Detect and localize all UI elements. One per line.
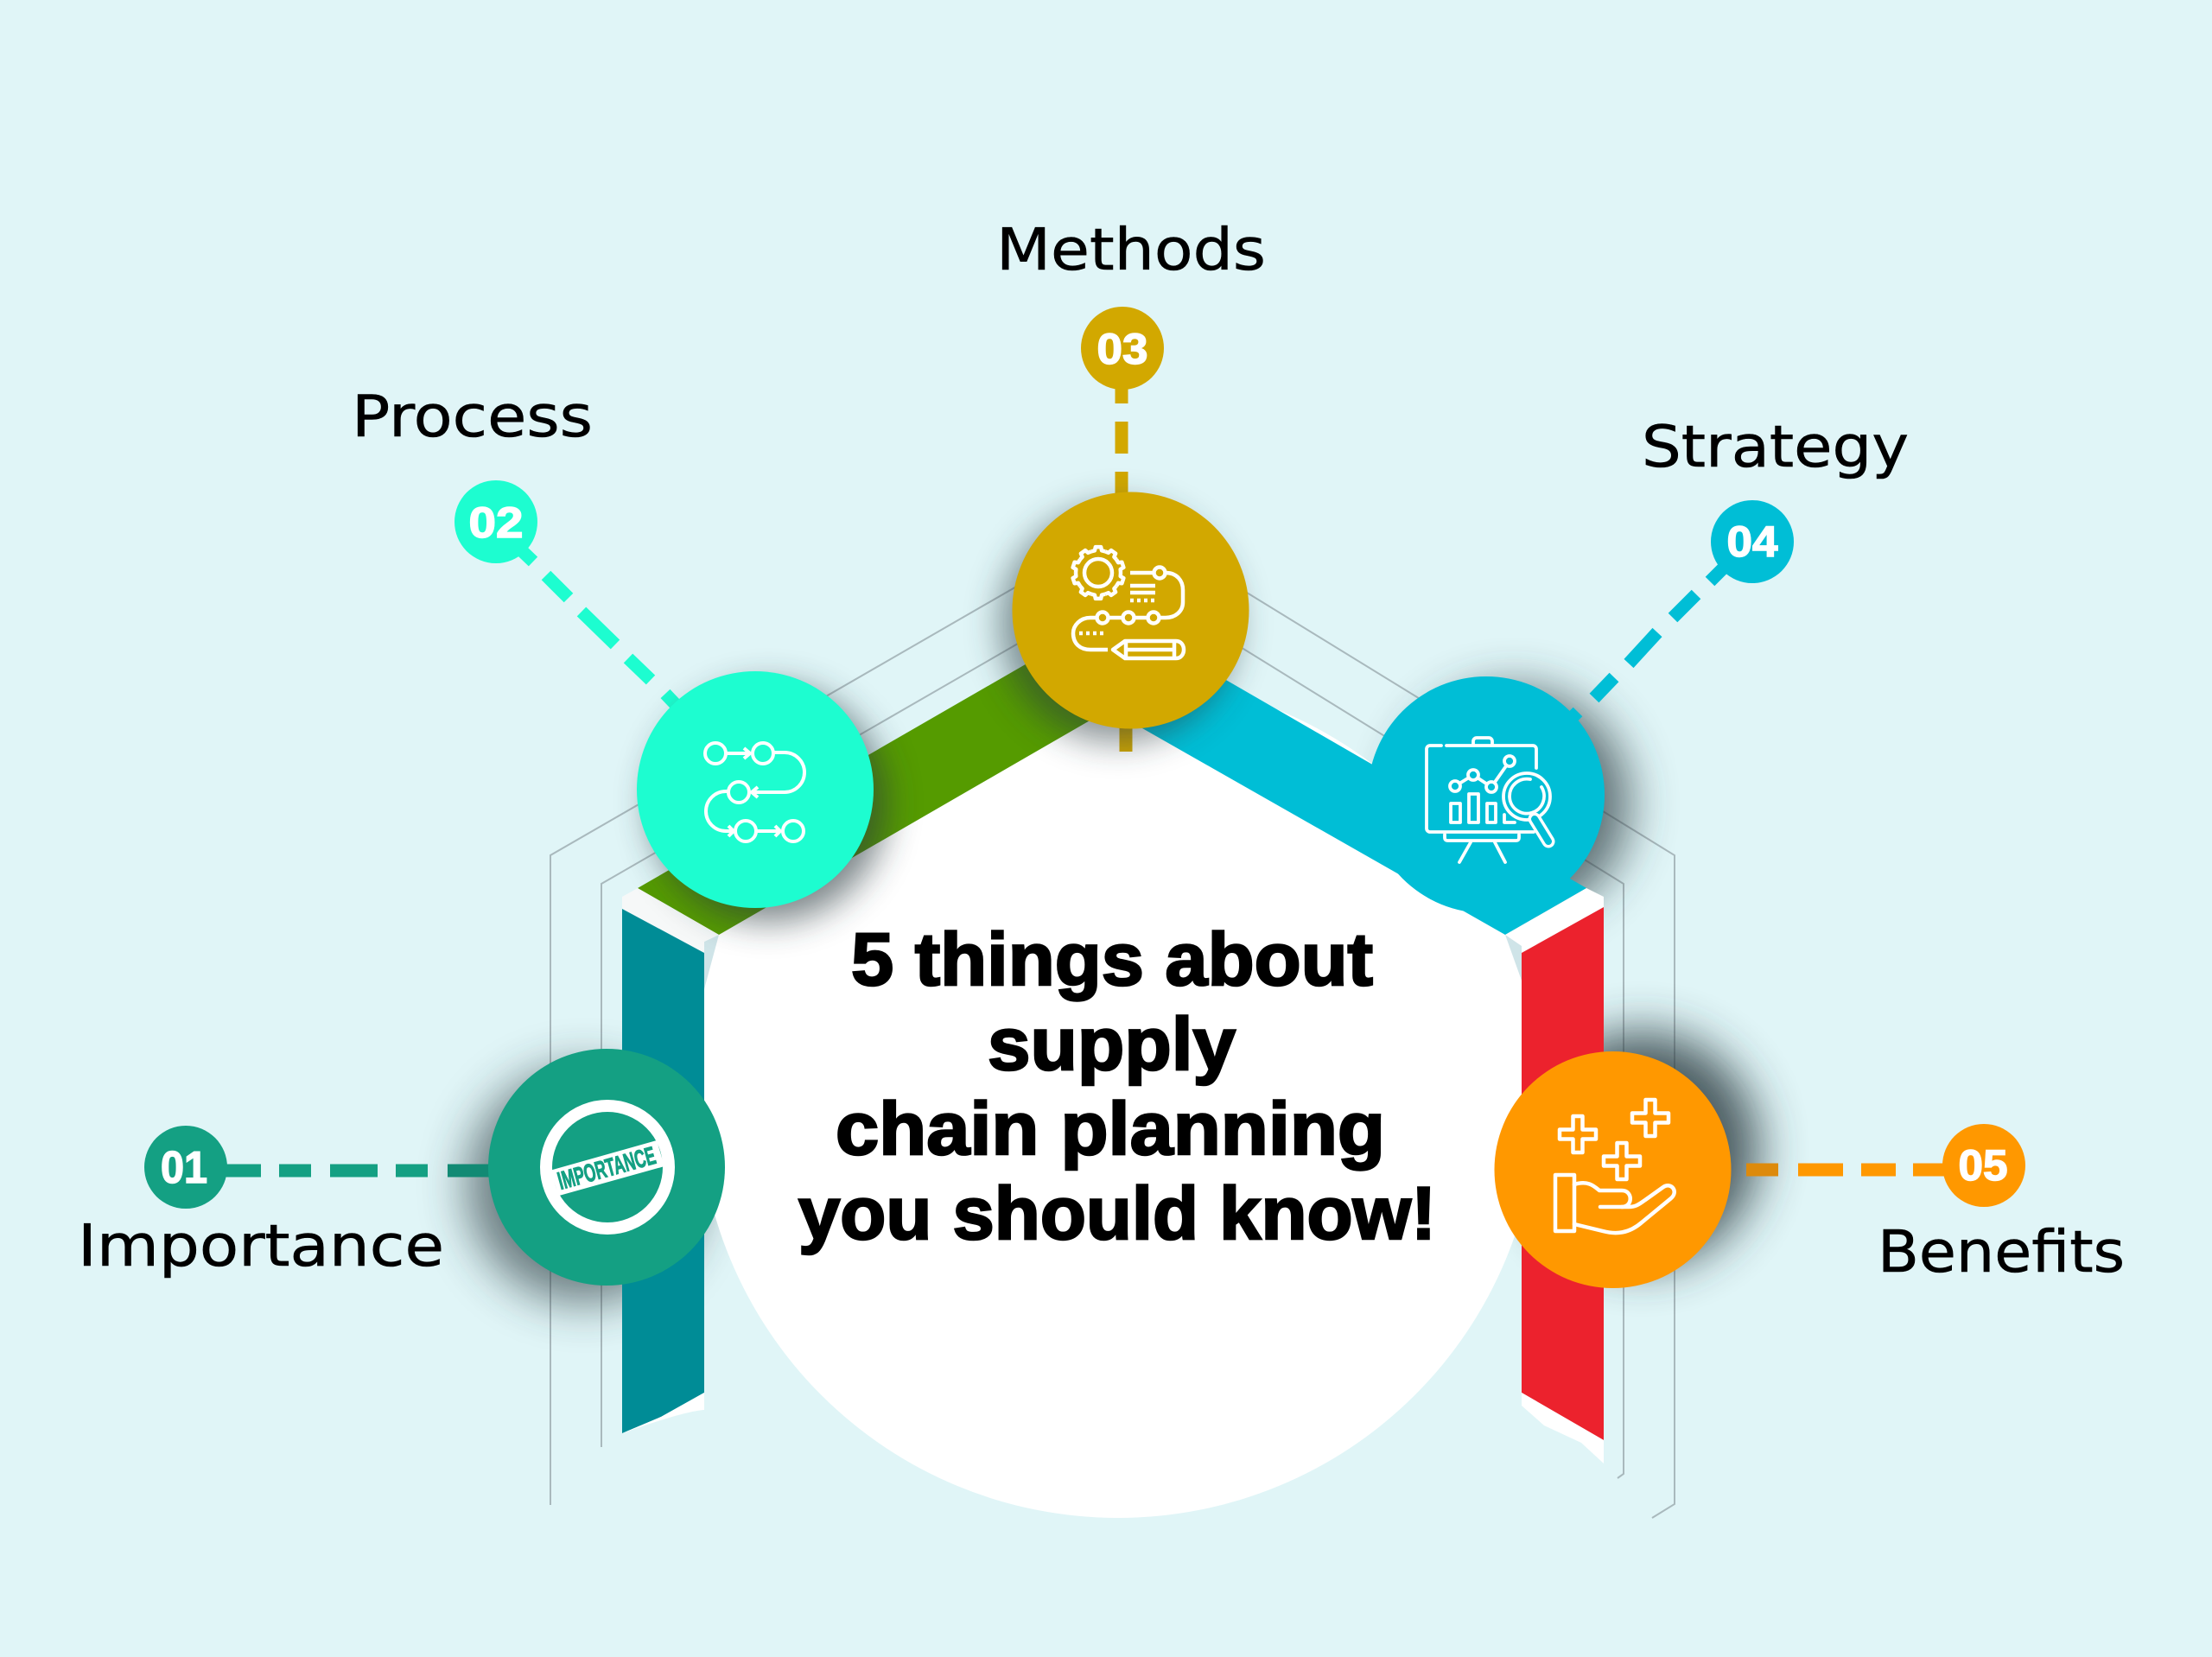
title: you should know! [798, 1172, 1436, 1255]
main circle 03: methods [1013, 492, 1249, 729]
band: teal left wall [622, 909, 704, 1433]
band: cyan roof [1130, 625, 1586, 935]
shadows falling on the background [467, 688, 1759, 1303]
main circle 05: benefits [1495, 1051, 1732, 1288]
title [798, 918, 1436, 1255]
connector: 05 dashed line [1746, 1163, 1955, 1177]
title: chain planning [836, 1088, 1385, 1171]
band: white strip left [622, 888, 719, 953]
icon: presentation board with magnifier [1427, 738, 1550, 862]
badge 04 [1711, 500, 1794, 583]
connector: 01 dashed line [220, 1165, 497, 1177]
title: 5 things about [851, 918, 1373, 1001]
main circle 01: importance [488, 1049, 725, 1286]
icon: importance stamp: IMPORTANCE [555, 1142, 658, 1196]
icon: importance stamp [546, 1106, 669, 1228]
outline: grey isometric frame lines [550, 521, 1675, 1518]
main circle 04: strategy [1368, 676, 1605, 913]
label: Importance: Importance [78, 1212, 444, 1279]
band: green roof [638, 604, 1130, 935]
white bottom tip right [1522, 1393, 1604, 1463]
main circle 02: process [637, 671, 874, 908]
connector: 03 dashed line [1122, 380, 1126, 752]
shadows falling on the bands [650, 505, 1236, 922]
band: white strip right [1505, 888, 1604, 953]
badge 01: 01 [161, 1143, 207, 1193]
badge 05: 05 [1958, 1141, 2008, 1190]
title: supply [988, 1003, 1236, 1086]
label: Process: Process [352, 383, 593, 450]
label: Strategy: Strategy [1642, 413, 1909, 480]
white bottom tip left [622, 1393, 704, 1433]
central white shape [698, 678, 1538, 1518]
badge 03: 03 [1097, 325, 1147, 373]
band: light wedges [704, 935, 1522, 989]
connector: 04 dashed line [1566, 559, 1732, 724]
label: Methods: Methods [996, 216, 1266, 283]
connector: 02 dashed line [515, 544, 683, 712]
badge 03 [1081, 307, 1164, 390]
icon: gear, path and pencil [1071, 547, 1184, 658]
band: red right wall [1522, 907, 1604, 1463]
badge 01 [144, 1126, 227, 1209]
badge 04: 04 [1726, 517, 1778, 566]
icon: hand with plus signs [1555, 1100, 1675, 1233]
badge 02: 02 [468, 498, 524, 547]
badge 02 [454, 480, 537, 563]
badge 05 [1942, 1124, 2025, 1207]
icon: process flow [705, 743, 804, 841]
label: Benefits: Benefits [1878, 1218, 2125, 1286]
